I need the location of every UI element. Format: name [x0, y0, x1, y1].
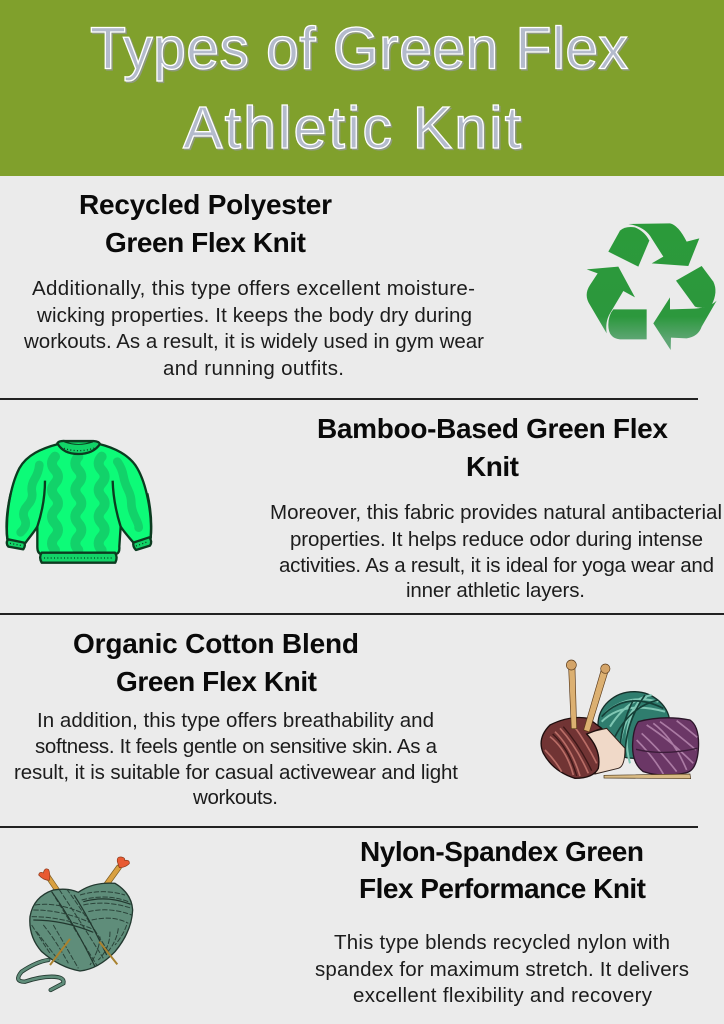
text: bamboo-based description: properties. It helps reduce odor during intense [290, 528, 703, 551]
text: nylon-spandex description: This type blends recycled nylon with [334, 931, 670, 954]
text: bamboo-based description [270, 501, 722, 602]
heading: nylon-spandex: Flex Performance Knit [359, 873, 646, 904]
title: Athletic Knit [184, 96, 522, 162]
title [90, 16, 630, 162]
title: Types of Green Flex [92, 17, 630, 83]
text: recycled polyester description: workouts. As a result, it is widely used in gym wear [23, 330, 484, 353]
panel: organic cotton blend [14, 628, 699, 809]
icon: green sweater [7, 441, 151, 563]
icon: yarn balls and needles [541, 660, 699, 779]
text: organic cotton description: In addition, this type offers breathability and [37, 709, 434, 732]
heading: bamboo-based [317, 413, 668, 482]
heading: recycled polyester [79, 189, 332, 258]
text: recycled polyester description: and running outfits. [163, 357, 344, 380]
text: nylon-spandex description: spandex for maximum stretch. It delivers [315, 958, 689, 981]
panel: bamboo-based [7, 413, 722, 602]
text: bamboo-based description: inner athletic layers. [406, 579, 585, 602]
heading: organic cotton blend: Green Flex Knit [116, 666, 317, 697]
divider line 2 [0, 613, 724, 615]
divider line 1 [0, 398, 698, 400]
text: bamboo-based description: activities. As a result, it is ideal for yoga wear and [279, 554, 714, 577]
title: Athletic Knit [183, 95, 521, 161]
heading: recycled polyester: Green Flex Knit [105, 227, 306, 258]
icon: recycling symbol [587, 223, 717, 350]
text: nylon-spandex description: excellent flexibility and recovery [353, 984, 653, 1007]
divider line 3 [0, 826, 698, 828]
text: recycled polyester description [23, 277, 484, 380]
text: recycled polyester description: Additionally, this type offers excellent moisture- [32, 277, 475, 300]
heading: nylon-spandex: Nylon-Spandex Green [360, 836, 644, 867]
icon: heart-shaped yarn ball [18, 857, 133, 990]
heading: bamboo-based: Bamboo-Based Green Flex [317, 413, 668, 444]
panel: nylon-spandex [18, 836, 689, 1007]
text: organic cotton description [14, 709, 458, 809]
panel: recycled polyester [23, 189, 717, 380]
heading: organic cotton blend: Organic Cotton Blend [73, 628, 359, 659]
text: organic cotton description: softness. It feels gentle on sensitive skin. As a [35, 735, 438, 758]
title: Types of Green Flex [90, 16, 628, 82]
text: bamboo-based description: Moreover, this fabric provides natural antibacterial [270, 501, 722, 524]
text: organic cotton description: workouts. [192, 786, 278, 809]
heading: bamboo-based: Knit [466, 451, 519, 482]
heading: nylon-spandex [359, 836, 646, 904]
text: organic cotton description: result, it is suitable for casual activewear and light [14, 761, 458, 784]
text: nylon-spandex description [315, 931, 689, 1007]
header banner [0, 0, 724, 176]
heading: recycled polyester: Recycled Polyester [79, 189, 332, 220]
heading: organic cotton blend [73, 628, 359, 697]
text: recycled polyester description: wicking properties. It keeps the body dry during [36, 304, 472, 327]
